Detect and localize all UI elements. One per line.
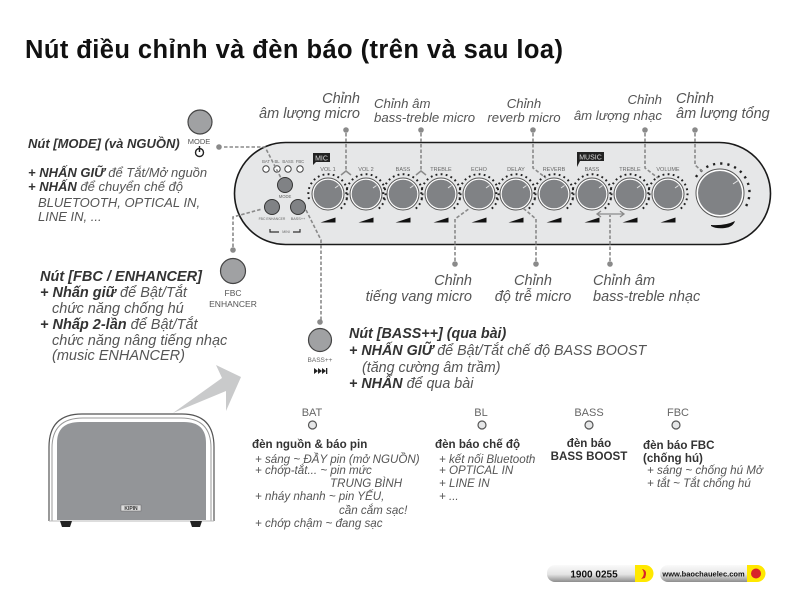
arrow: from speaker to panel (173, 365, 241, 413)
button: BASS++ (308, 328, 333, 374)
knob labels: VOL 2 (358, 167, 374, 173)
indicator: BAT (252, 407, 420, 530)
indicator: BAT: + nháy nhanh ~ pin YẾU, (255, 490, 384, 503)
MIC badge: MIC (315, 156, 328, 162)
callouts: top labels: Chỉnh (676, 91, 714, 107)
leader lines (216, 127, 703, 325)
text block: FBC ENHANCER: chức năng chống hú (52, 301, 184, 317)
indicator: BAT: cần cắm sạc! (339, 504, 408, 517)
knob labels: BASS (396, 167, 411, 173)
title: Nút điều chỉnh và đèn báo (trên và sau loa) (25, 36, 563, 64)
text block: BASS++: + NHẤN để qua bài (349, 374, 474, 392)
text block: BASS++ (349, 326, 647, 392)
callouts: top labels: âm lượng nhạc (574, 108, 662, 123)
callouts: bottom labels: bass-treble nhạc (593, 289, 701, 305)
panel: speaker top control panel (234, 142, 770, 244)
knob labels: ECHO (471, 167, 488, 173)
button: MODE (188, 110, 212, 156)
callouts: top labels: Chỉnh (322, 91, 360, 107)
text block: FBC ENHANCER: (music ENHANCER) (52, 348, 185, 364)
button: FBC ENHANCER: FBC (224, 288, 242, 298)
callouts: bottom labels: Chỉnh âm (593, 273, 655, 289)
LED indicator row: BL (274, 159, 280, 164)
text block: MODE: BLUETOOTH, OPTICAL IN, (38, 195, 200, 210)
text block: BASS++: (tăng cường âm trầm) (362, 360, 500, 376)
text block: MODE: Nút [MODE] (và NGUỒN) (28, 136, 180, 151)
button: MODE: MODE (188, 137, 210, 146)
indicator: BAT: đèn nguồn & báo pin (252, 438, 367, 451)
indicator: FBC: (chống hú) (643, 452, 703, 465)
callouts: top labels: âm lượng micro (259, 106, 360, 122)
indicator: FBC: đèn báo FBC (643, 439, 715, 452)
indicator: BL: + kết nối Bluetooth (439, 453, 535, 466)
indicator: BASS: BASS BOOST (551, 450, 627, 463)
callouts: bottom labels: độ trễ micro (495, 288, 571, 305)
indicator: FBC: FBC (667, 407, 689, 419)
callouts: bottom labels: tiếng vang micro (366, 289, 472, 305)
callouts: top labels (259, 91, 770, 125)
button: BASS++: BASS++ (308, 357, 333, 364)
indicator: BAT: + sáng ~ ĐẦY pin (mở NGUỒN) (255, 453, 420, 466)
indicator: BASS: đèn báo (567, 437, 611, 450)
indicator: BL: đèn báo chế độ (435, 438, 520, 451)
indicator: BAT: + chớp chậm ~ đang sạc (255, 517, 383, 530)
text block: FBC ENHANCER: chức năng nâng tiếng nhạc (52, 333, 228, 349)
footer: website pill: www.baochauelec.com (661, 570, 745, 578)
text block: BASS++: + NHẤN GIỮ để Bật/Tắt chế độ BASS BOOST (349, 341, 647, 359)
button: FBC ENHANCER: ENHANCER (209, 299, 257, 309)
knob labels: REVERB (543, 167, 566, 173)
callouts: top labels: reverb micro (487, 110, 561, 125)
indicator: BAT: + chớp-tắt... ~ pin mức (255, 464, 372, 477)
text block: FBC ENHANCER: + Nhấp 2-lần để Bật/Tắt (40, 316, 199, 333)
panel buttons: MODE, FBC, BASS++: MINI (282, 230, 290, 234)
footer: hotline pill: 1900 0255 (570, 570, 618, 580)
indicator: BAT: BAT (302, 407, 323, 419)
callouts: top labels: Chỉnh âm (374, 96, 430, 111)
callouts: top labels: âm lượng tổng (676, 106, 770, 122)
callouts: bottom labels: Chỉnh (434, 273, 472, 289)
panel buttons: MODE, FBC, BASS++: MODE (279, 194, 291, 199)
knob labels: TREBLE (619, 167, 641, 173)
callouts: top labels: Chỉnh (507, 96, 541, 111)
indicator: FBC (643, 407, 764, 490)
LED indicator row: FBC (296, 159, 304, 164)
knob labels: TREBLE (430, 167, 452, 173)
LED indicator row: BAT (262, 159, 270, 164)
speaker illustration (49, 414, 214, 527)
text block: FBC ENHANCER (40, 269, 228, 364)
footer: hotline pill (547, 565, 654, 582)
master volume knob (696, 164, 749, 228)
indicator: FBC: + sáng ~ chống hú Mở (647, 464, 764, 477)
button: FBC ENHANCER (209, 258, 257, 309)
text block: MODE: + NHẤN để chuyển chế độ (28, 179, 183, 194)
indicator: FBC: + tắt ~ Tắt chống hú (647, 477, 751, 490)
knobs (308, 174, 688, 210)
MUSIC badge: MUSIC (579, 154, 602, 162)
callouts: bottom labels (366, 273, 701, 305)
indicator: BASS (551, 407, 627, 463)
wedge level marks (320, 218, 676, 222)
text block: FBC ENHANCER: + Nhấn giữ để Bật/Tắt (40, 284, 188, 301)
text block: FBC ENHANCER: Nút [FBC / ENHANCER] (40, 269, 203, 285)
indicator: BL: + OPTICAL IN (439, 464, 514, 477)
callouts: bottom labels: Chỉnh (514, 273, 552, 289)
LED indicator row: BASS (282, 159, 294, 164)
indicator: BL (435, 407, 535, 503)
MUSIC badge (577, 152, 604, 167)
panel buttons: MODE, FBC, BASS++: FBC ENHANCER (259, 217, 286, 221)
MIC badge (313, 153, 330, 165)
indicator: BL: BL (474, 407, 488, 419)
callouts: top labels: Chỉnh (628, 92, 662, 107)
callouts: top labels: bass-treble micro (374, 110, 475, 125)
knob labels: DELAY (507, 167, 525, 173)
indicator: BL: + LINE IN (439, 477, 490, 490)
text block: MODE: LINE IN, ... (38, 209, 102, 224)
indicator: BL: + ... (439, 490, 459, 503)
text block: BASS++: Nút [BASS++] (qua bài) (349, 326, 507, 342)
panel buttons: MODE, FBC, BASS++ (259, 178, 306, 234)
panel buttons: MODE, FBC, BASS++: BASS++ (291, 217, 306, 221)
indicator: BAT: TRUNG BÌNH (330, 477, 403, 490)
speaker illustration: KIPIN (124, 506, 138, 512)
knob labels: VOLUME (656, 167, 680, 173)
LED indicator row (262, 159, 304, 172)
knob labels: VOL 1 (320, 167, 336, 173)
knob labels: BASS (585, 167, 600, 173)
knob labels (320, 167, 680, 173)
footer: website pill (660, 565, 766, 582)
indicator: BASS: BASS (574, 407, 604, 419)
text block: MODE (28, 136, 207, 224)
text block: MODE: + NHẤN GIỮ để Tắt/Mở nguồn (28, 165, 207, 180)
